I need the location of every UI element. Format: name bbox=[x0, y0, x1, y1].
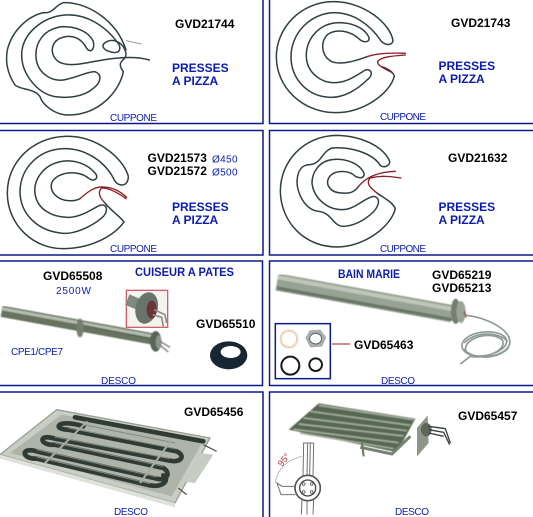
heading line 2: A PIZZA bbox=[438, 72, 485, 86]
brand: CUPPONE bbox=[380, 244, 426, 255]
photo: seal GVD65510 bbox=[210, 341, 247, 369]
photo: coiled wire bbox=[460, 315, 510, 364]
part number 2: GVD65213 bbox=[432, 281, 492, 295]
panel: GVD21632 bbox=[270, 130, 533, 255]
part number: GVD65457 bbox=[458, 409, 518, 423]
part number: GVD21743 bbox=[451, 16, 511, 30]
panel: GVD21744 bbox=[0, 0, 263, 124]
heading: presses a pizza: PRESSES bbox=[438, 59, 495, 73]
part number: GVD65508 bbox=[43, 269, 103, 283]
part number 1: GVD65219 bbox=[432, 268, 492, 282]
photo: finned heating element bbox=[289, 403, 450, 456]
panel: GVD65456 bbox=[0, 392, 263, 517]
part number seal: GVD65510 bbox=[196, 317, 256, 331]
diameter 500: Ø500 bbox=[212, 168, 238, 178]
icon: heating spiral GVD21744 bbox=[7, 3, 149, 115]
panel: cuiseur a pates bbox=[0, 261, 262, 387]
heading line 2: A PIZZA bbox=[172, 74, 219, 88]
heading: bain marie: BAIN MARIE bbox=[338, 267, 400, 281]
brand: CUPPONE bbox=[110, 113, 157, 124]
part number kit: GVD65463 bbox=[354, 338, 414, 352]
heading line 2: A PIZZA bbox=[438, 213, 485, 227]
heading: presses a pizza: PRESSES bbox=[438, 200, 495, 214]
part number 1: GVD21573 bbox=[148, 151, 207, 165]
part number 2: GVD21572 bbox=[148, 164, 207, 178]
diagram: angle schematic bbox=[275, 443, 320, 515]
panel: GVD65457 bbox=[270, 392, 533, 517]
panel: bain marie bbox=[270, 261, 533, 387]
part number: GVD21632 bbox=[448, 151, 508, 165]
inset: rod terminal detail bbox=[126, 290, 168, 327]
photo: heating rod GVD65508 bbox=[2, 309, 170, 352]
part number: GVD65456 bbox=[184, 405, 244, 419]
heading: presses a pizza: PRESSES bbox=[172, 200, 229, 214]
icon: heating spiral GVD21632 bbox=[280, 135, 401, 247]
heading: presses a pizza: PRESSES bbox=[172, 61, 229, 75]
heading: cuiseur a pates: CUISEUR A PATES bbox=[135, 265, 234, 279]
panel: GVD21573 / GVD21572 bbox=[0, 130, 263, 255]
heading line 2: A PIZZA bbox=[172, 213, 219, 227]
photo: tray heating element bbox=[0, 410, 217, 507]
power: 2500W bbox=[56, 286, 92, 297]
photo: heating rod GVD65219 bbox=[277, 277, 466, 324]
diameter 450: Ø450 bbox=[212, 154, 238, 166]
inset: seal kit GVD65463 bbox=[275, 324, 330, 379]
icon: heating spiral GVD21743 bbox=[276, 2, 405, 113]
label: 95 degree angle: 95° bbox=[276, 451, 292, 468]
brand: CUPPONE bbox=[110, 244, 157, 255]
arrow: connector line to part number bbox=[332, 343, 350, 345]
model: CPE1/CPE7 bbox=[11, 347, 63, 358]
icon: heating spiral GVD21573 bbox=[7, 136, 128, 249]
panel: GVD21743 bbox=[270, 0, 533, 124]
part number: GVD21744 bbox=[175, 17, 235, 31]
brand: CUPPONE bbox=[380, 112, 426, 123]
brand: DESCO bbox=[101, 376, 136, 387]
brand: DESCO bbox=[381, 376, 415, 387]
